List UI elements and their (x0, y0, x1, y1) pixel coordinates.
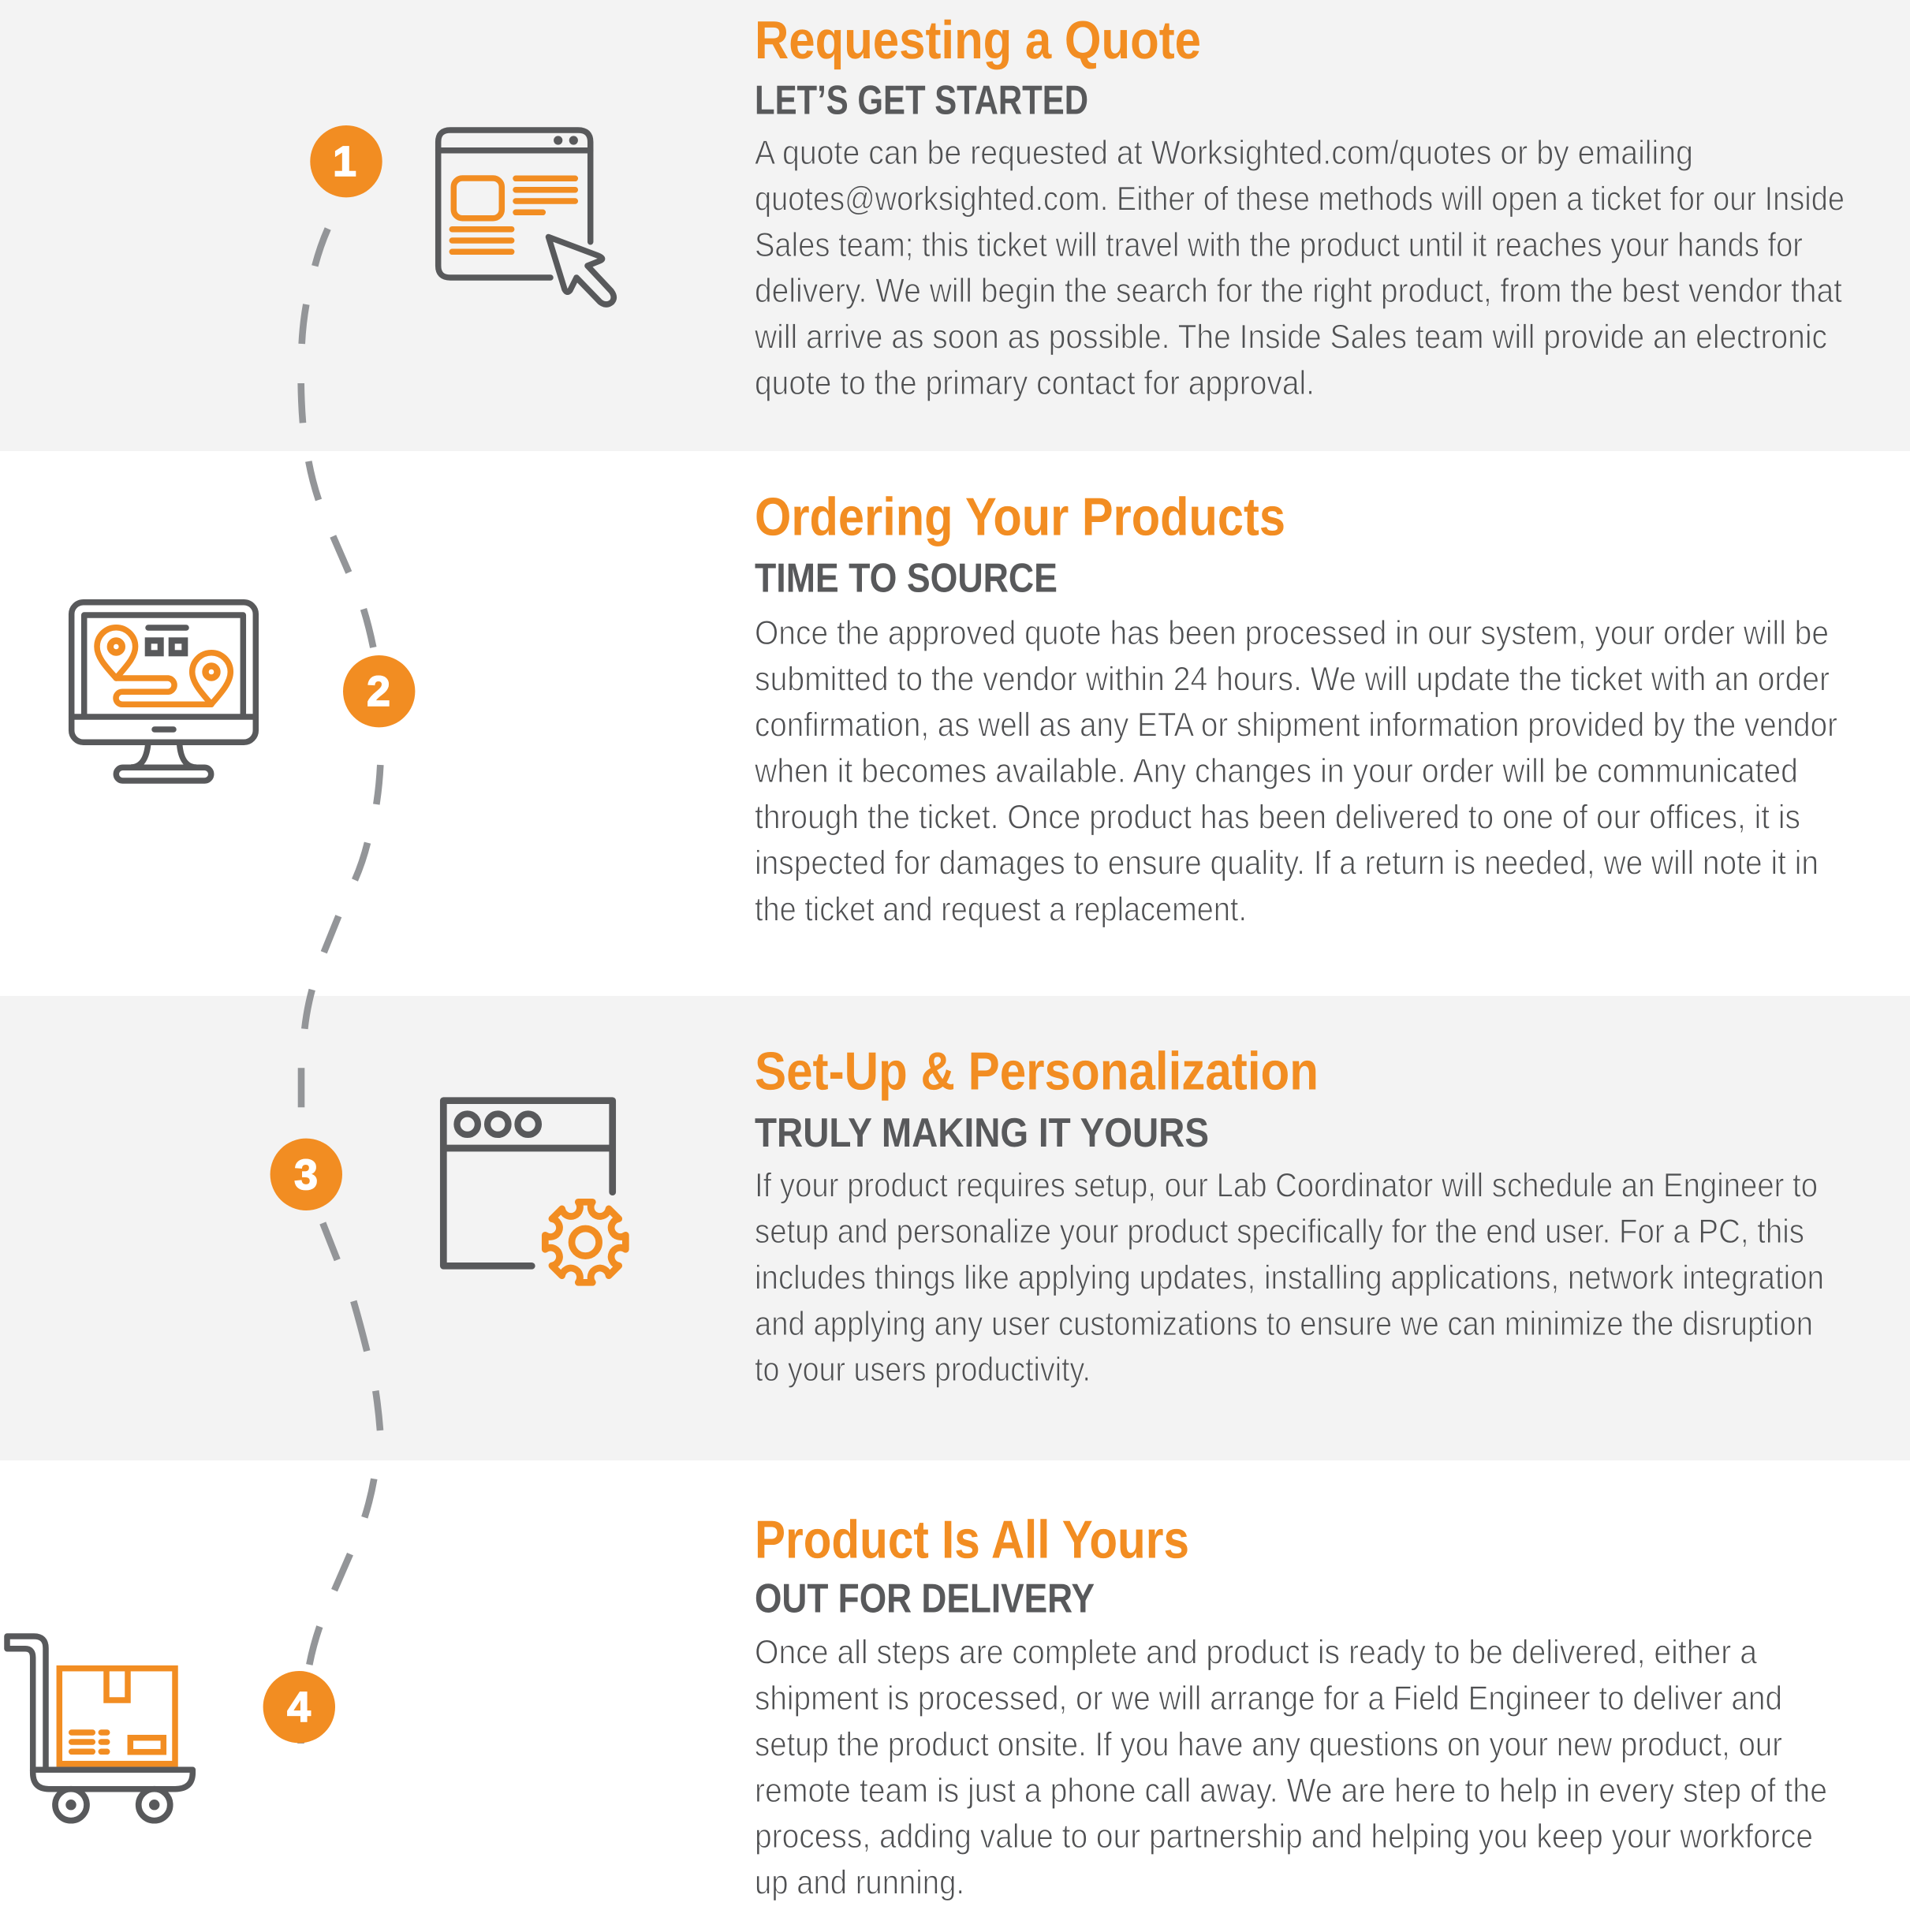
icon: browser window with cursor (438, 130, 614, 304)
step number 4 (263, 1671, 335, 1743)
heading: requesting a quote: Requesting a Quote (755, 10, 1201, 70)
icon: hand cart with box (7, 1636, 192, 1821)
heading: set-up and personalization: Set-Up & Personalization (755, 1041, 1319, 1101)
step number 1: 1 (333, 138, 356, 185)
body text 4 (755, 1634, 1827, 1902)
panel: product is all yours (0, 1460, 1910, 1932)
step number 3 (270, 1139, 342, 1210)
body text 4: Once all steps are complete and product is ready to be delivered, either a (755, 1634, 1757, 1672)
step number 4: 4 (287, 1684, 311, 1731)
step number 3: 3 (294, 1151, 318, 1199)
dashed connector path (301, 229, 380, 1744)
panel background 3 (0, 996, 1910, 1460)
panel background 1 (0, 0, 1910, 451)
step number 1 (310, 125, 382, 197)
body text 2: inspected for damages to ensure quality. If a return is needed, we will note it in (755, 845, 1819, 882)
panel: requesting a quote (0, 0, 1910, 451)
subheading: truly making it yours: TRULY MAKING IT YOURS (755, 1110, 1209, 1156)
body text 3 (755, 1166, 1824, 1389)
heading: ordering your products: Ordering Your Products (755, 487, 1285, 547)
body text 4: setup the product onsite. If you have any questions on your new product, our (755, 1725, 1782, 1763)
body text 3: to your users productivity. (755, 1351, 1091, 1389)
body text 3: and applying any user customizations to ensure we can minimize the disruption (755, 1305, 1813, 1343)
body text 4: remote team is just a phone call away. We are here to help in every step of the (755, 1772, 1827, 1810)
body text 1: quote to the primary contact for approval. (755, 364, 1315, 402)
body text 1: Sales team; this ticket will travel with the product until it reaches your hands for (755, 226, 1803, 264)
panel: ordering your products (0, 451, 1910, 996)
body text 2 (754, 614, 1837, 928)
body text 1: will arrive as soon as possible. The Inside Sales team will provide an electronic (754, 319, 1827, 356)
body text 1 (754, 134, 1845, 402)
icon: browser window with gear (443, 1101, 625, 1282)
body text 1: A quote can be requested at Worksighted.com/quotes or by emailing (755, 134, 1693, 172)
body text 2: submitted to the vendor within 24 hours. We will update the ticket with an order (755, 660, 1830, 698)
body text 3: setup and personalize your product specifically for the end user. For a PC, this (755, 1213, 1804, 1251)
body text 4: process, adding value to our partnership and helping you keep your workforce (755, 1818, 1813, 1856)
subheading: out for delivery: OUT FOR DELIVERY (755, 1576, 1095, 1621)
body text 2: when it becomes available. Any changes in your order will be communicated (754, 752, 1798, 790)
body text 4: up and running. (755, 1864, 964, 1902)
icon: monitor with delivery route map (72, 602, 256, 781)
body text 2: the ticket and request a replacement. (755, 890, 1247, 928)
subheading: time to source: TIME TO SOURCE (755, 555, 1058, 601)
step number 2 (343, 655, 415, 727)
panel background 2 (0, 451, 1910, 996)
subheading: let's get started: LET’S GET STARTED (755, 77, 1088, 123)
body text 2: Once the approved quote has been processed in our system, your order will be (755, 614, 1829, 652)
heading: product is all yours: Product Is All Yours (755, 1509, 1189, 1569)
body text 2: through the ticket. Once product has been delivered to one of our offices, it is (755, 799, 1800, 837)
step number 2: 2 (367, 668, 390, 715)
body text 4: shipment is processed, or we will arrange for a Field Engineer to deliver and (755, 1680, 1782, 1718)
panel: set-up and personalization (0, 996, 1910, 1460)
panel background 4 (0, 1460, 1910, 1932)
